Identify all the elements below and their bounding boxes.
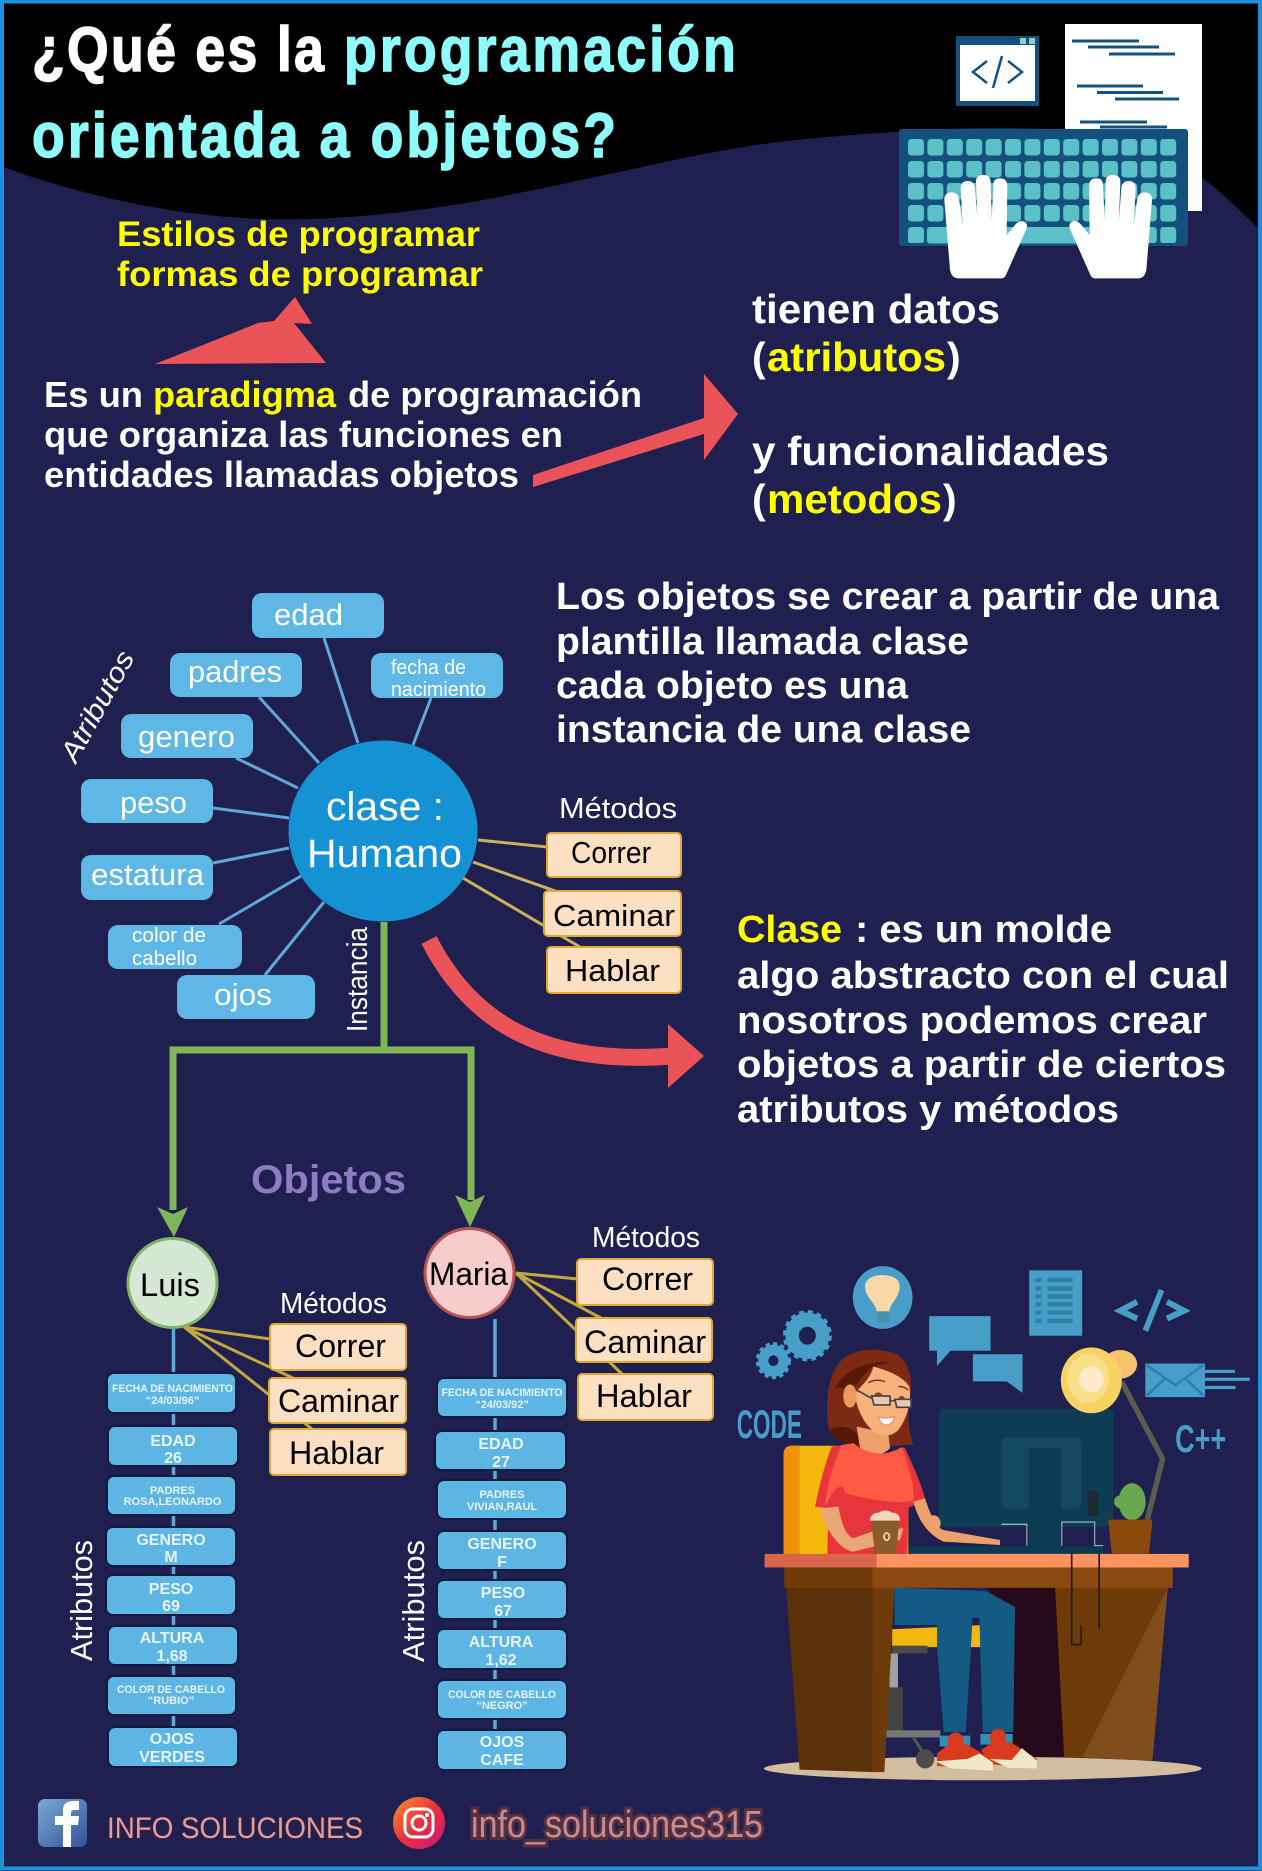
method: correr [547,833,681,877]
box: ojos [177,975,315,1019]
text: estilos de programar: formas de programar [117,255,483,294]
object column lines [174,1319,495,1735]
icon: envelope [1145,1364,1250,1397]
box: color de cabello: color de [132,925,206,947]
attributes: luis: “24/03/96” [146,1395,199,1407]
attributes: luis: FECHA DE NACIMIENTO [112,1383,233,1395]
attributes: luis: OJOS [150,1731,195,1748]
attributes: luis: “RUBIO” [148,1695,194,1707]
method lines: luis [184,1327,312,1429]
attributes: maria: EDAD [478,1436,524,1453]
methods: maria: Métodos [592,1222,700,1254]
object: luis: Luis [140,1267,200,1303]
face [855,1367,910,1435]
box: edad: edad [274,597,343,632]
box: padres: padres [188,654,282,689]
label: c++: C++ [1175,1417,1226,1461]
woman legs [895,1587,1015,1732]
attributes: luis: ALTURA [140,1630,205,1647]
text: clase definition: atributos y métodos [737,1089,1119,1131]
attributes: maria [435,1378,567,1770]
label: metodos class: Métodos [559,793,677,825]
right arm [913,1498,1000,1545]
box: peso [81,779,213,823]
attributes: maria: PADRES [479,1489,525,1501]
methods: luis: Caminar [278,1383,399,1419]
desk lamp [1061,1347,1163,1520]
attributes: luis: PESO [149,1581,193,1598]
class circle: clase : [326,785,444,829]
attributes: maria: OJOS [480,1734,525,1751]
neck [857,1427,890,1455]
box: fecha de nacimiento: nacimiento [391,679,486,701]
glasses [857,1390,911,1407]
attributes: maria: COLOR DE CABELLO [448,1689,556,1701]
attributes: maria: ALTURA [469,1634,534,1651]
title: ¿Qué es la [32,15,324,85]
label: atributos maria: Atributos [396,1540,431,1662]
cup logo [884,1533,889,1540]
monitor [910,1409,1113,1554]
text: clase definition: : es un molde [855,909,1112,951]
box: ojos: ojos [214,977,272,1012]
footer: facebook [38,1799,87,1847]
method lines: maria [516,1273,622,1374]
attributes: maria: PESO [481,1585,525,1602]
text: datos y funcionalidades: ( [752,476,766,522]
label: code: CODE [737,1403,802,1447]
floor shadow [764,1757,1202,1780]
class circle: Humano [307,832,462,876]
methods: luis: Correr [295,1328,386,1364]
text: clase definition: algo abstracto con el cual [737,955,1229,997]
text: datos y funcionalidades: tienen datos [752,286,1000,332]
arrow: curved to clase [429,940,704,1088]
footer: instagram handle: info_soluciones315 [471,1804,763,1846]
green instance connector [157,922,485,1237]
text: datos y funcionalidades: atributos [767,334,946,380]
attributes: maria: 67 [494,1603,512,1620]
attributes: maria: VIVIAN,RAUL [467,1501,537,1513]
text: datos y funcionalidades: ( [752,334,766,380]
text: datos y funcionalidades: y funcionalidades [752,428,1109,474]
box: estatura [81,855,213,900]
methods: maria: Caminar [584,1324,706,1360]
attributes: maria: GENERO [467,1536,537,1553]
box: padres [170,653,302,697]
text: paradigma definition: que organiza las funciones en [44,414,563,455]
shoes [935,1729,1037,1771]
label: instancia: Instancia [342,926,374,1032]
icon: code tag [1120,1290,1184,1331]
title: orientada a objetos? [32,101,616,171]
methods: maria [576,1222,713,1420]
mouth [878,1417,895,1425]
icon: code window [956,36,1039,106]
coffee cup [871,1520,899,1554]
eyes [874,1392,905,1399]
methods: luis [269,1288,406,1475]
attributes: luis: 1,68 [156,1648,188,1665]
attributes: luis: 26 [164,1450,182,1467]
header black wave [0,0,1262,232]
attributes: luis: 69 [162,1598,180,1615]
box: estatura: estatura [91,857,205,892]
icon: gears [757,1312,830,1377]
attributes: maria: FECHA DE NACIMIENTO [442,1387,563,1399]
desk [765,1554,1189,1588]
icon: keyboard [899,129,1188,246]
title [32,15,736,171]
eyebrows [868,1380,908,1390]
cables [1072,1554,1099,1645]
icon: speech bubbles [929,1316,1022,1393]
attributes: luis: COLOR DE CABELLO [117,1684,225,1696]
shirt [815,1443,925,1555]
attributes: luis [106,1373,238,1767]
methods: luis: Hablar [289,1435,384,1471]
method: hablar: Hablar [565,953,660,988]
method: caminar: Caminar [553,898,675,933]
text: paradigma definition: Es un [44,374,143,415]
class circle [288,740,478,922]
connector lines: attributes [213,638,431,975]
footer: instagram [393,1797,445,1849]
attributes: luis: M [164,1549,178,1566]
coffee foam [870,1510,900,1521]
methods: maria: Hablar [596,1378,692,1414]
attributes: luis: GENERO [136,1532,206,1549]
text: los objetos [556,576,1220,751]
method: caminar [544,891,681,936]
text: clase definition: nosotros podemos crear [737,1000,1207,1042]
heading: objetos: Objetos [251,1158,406,1202]
chair [784,1446,983,1769]
attributes: luis: VERDES [139,1749,205,1766]
text: datos y funcionalidades: ) [947,334,961,380]
attributes: maria: “NEGRO” [476,1700,528,1712]
object: maria [425,1228,514,1318]
text: los objetos: cada objeto es una [556,665,909,707]
text: estilos de programar [117,215,483,294]
connector lines: methods [463,840,580,947]
box: edad [252,593,384,638]
text: clase definition [737,909,1229,1131]
methods: luis: Métodos [280,1288,387,1320]
icon: typing hands [944,175,1152,278]
text: estilos de programar: Estilos de programar [117,215,480,254]
icon: code paper [1065,24,1202,211]
object: luis [128,1238,217,1328]
hand [926,1515,941,1531]
methods: maria: Correr [602,1261,693,1297]
arrow: to datos [533,374,738,487]
attributes: maria: 27 [492,1454,510,1471]
cactus plant [1108,1483,1152,1554]
text: los objetos: instancia de una clase [556,709,971,751]
text: paradigma definition [44,374,642,495]
box: genero: genero [138,719,235,754]
text: paradigma definition: de programación [348,374,642,415]
method: hablar [547,947,681,993]
box: color de cabello [108,925,242,970]
attributes: luis: ROSA,LEONARDO [124,1496,222,1508]
woman: upper body and head [815,1350,1000,1557]
chair back sliver [898,1507,908,1557]
label: atributos luis: Atributos [64,1540,99,1661]
attributes: maria: 1,62 [485,1652,517,1669]
text: paradigma definition: paradigma [153,374,337,415]
attributes: maria: CAFE [480,1752,524,1769]
footer: info soluciones: INFO SOLUCIONES [107,1812,363,1845]
text: datos y funcionalidades [752,286,1109,522]
shirt highlight [825,1443,914,1507]
ear [843,1384,857,1408]
box: fecha de nacimiento [371,653,503,701]
arrow: to estilos [155,297,326,364]
text: clase definition: objetos a partir de ciertos [737,1044,1226,1086]
hair shadows [830,1362,890,1449]
desk pedestals [786,1587,1168,1772]
method: correr: Correr [571,835,651,870]
text: datos y funcionalidades: metodos [767,476,942,522]
text: clase definition: Clase [737,909,842,951]
box: fecha de nacimiento: fecha de [391,657,466,679]
illustration: programmer at desk [737,1266,1250,1780]
title: programación [344,15,736,85]
object: maria: Maria [429,1256,508,1292]
attributes: luis: EDAD [150,1433,196,1450]
text: datos y funcionalidades: ) [943,476,957,522]
box: genero [121,714,253,758]
label: atributos rotated: Atributos [53,645,140,769]
icon: light bulb [853,1266,913,1329]
text: paradigma definition: entidades llamadas objetos [44,454,519,495]
left arm [820,1507,903,1552]
box: peso: peso [120,785,187,820]
text: los objetos: Los objetos se crear a partir de una [556,576,1220,618]
icon: document [1029,1270,1082,1336]
hair [827,1350,913,1449]
attributes: maria: “24/03/92” [475,1399,529,1411]
box: color de cabello: cabello [132,948,197,970]
text: los objetos: plantilla llamada clase [556,621,969,663]
attributes: luis: PADRES [150,1485,195,1497]
attributes: maria: F [497,1554,507,1571]
